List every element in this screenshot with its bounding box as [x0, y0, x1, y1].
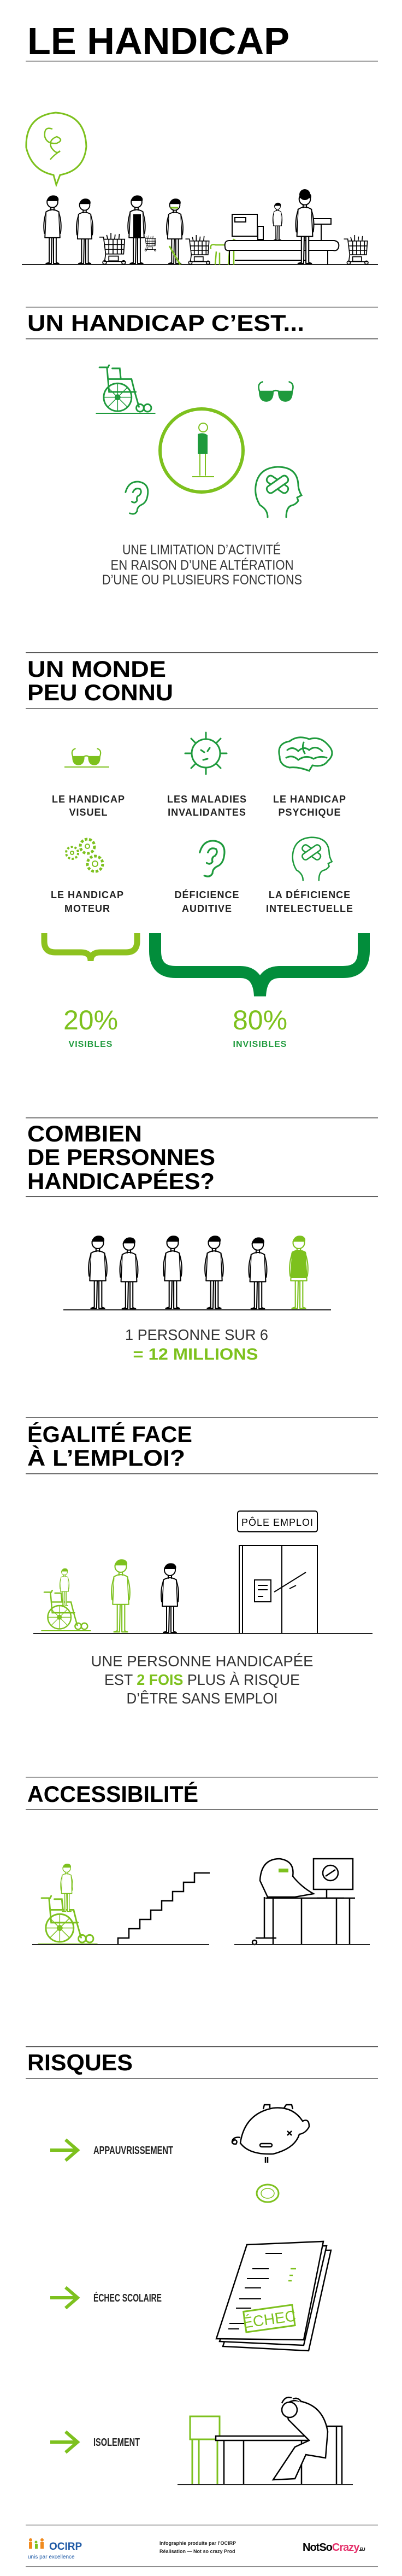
icon grid: types of handicap — [51, 733, 353, 914]
credits: Infographie produite par l’OCIRP — [159, 2540, 236, 2546]
heading: égalité face à l'emploi: ÉGALITÉ FACE — [27, 1421, 192, 1447]
text: definition: D’UNE OU PLUSIEURS FONCTIONS — [102, 572, 302, 588]
labels: LES MALADIES — [167, 794, 247, 805]
labels: LE HANDICAP — [273, 794, 346, 805]
labels: INTELECTUELLE — [266, 903, 353, 914]
icon: guide dog — [211, 239, 239, 265]
icon: wheelchair — [96, 365, 155, 413]
stat: 80%: 80% — [233, 1005, 287, 1035]
icon: glasses visuel — [64, 748, 109, 768]
illustration: definition icons — [96, 365, 302, 517]
icon: head intellectuelle — [293, 838, 332, 880]
text: 1 sur 6: 1 PERSONNE SUR 6 — [125, 1326, 268, 1343]
logo: OCIRP: OCIRP — [49, 2541, 82, 2552]
sign — [238, 1511, 317, 1532]
icon: ear — [126, 482, 148, 514]
risk: appauvrissement — [50, 2105, 309, 2202]
text: 1 sur 6 — [125, 1326, 268, 1363]
chart: brackets visible vs invisible — [44, 933, 364, 1049]
heading: un monde peu connu — [26, 652, 378, 709]
bracket: visibles — [44, 933, 137, 961]
stat: 20%: 20% — [63, 1005, 118, 1035]
arrow — [50, 2432, 78, 2452]
heading: un monde peu connu: UN MONDE — [27, 656, 166, 682]
footer — [26, 2525, 378, 2567]
heading: combien de personnes: HANDICAPÉES? — [27, 1168, 215, 1194]
title: LE HANDICAP — [27, 20, 289, 62]
icon: failed document — [216, 2241, 331, 2351]
credits — [159, 2540, 236, 2554]
heading: accessibilité: ACCESSIBILITÉ — [27, 1781, 198, 1807]
risk: échec scolaire: ÉCHEC — [241, 2307, 297, 2332]
icon: lonely table — [190, 2416, 220, 2485]
icon: central circle with person — [160, 409, 243, 492]
heading: un monde peu connu: PEU CONNU — [27, 680, 173, 705]
icon: glasses — [259, 382, 293, 401]
icon: gears — [66, 839, 103, 871]
text: 2 fois plus à risque: UNE PERSONNE HANDICAPÉE — [91, 1653, 314, 1670]
icon: head with bandage — [256, 467, 302, 517]
icon: brain — [279, 737, 332, 771]
labels: INVALIDANTES — [168, 807, 246, 818]
illustration: six people — [63, 1236, 331, 1310]
logo: OCIRP: unis par excellence — [28, 2554, 75, 2560]
text: 2 fois plus à risque: D’ÊTRE SANS EMPLOI — [127, 1690, 277, 1707]
heading: combien de personnes: COMBIEN — [27, 1121, 142, 1146]
icon: virus — [185, 733, 227, 774]
risk: échec scolaire: ÉCHEC SCOLAIRE — [93, 2292, 162, 2304]
labels: MOTEUR — [64, 903, 110, 914]
labels: LE HANDICAP — [51, 889, 124, 900]
text: 2 fois plus à risque — [91, 1653, 314, 1707]
labels: LA DÉFICIENCE — [269, 889, 351, 900]
heading: un handicap c'est: UN HANDICAP C’EST... — [27, 310, 304, 336]
icon: speech bubble — [26, 113, 86, 185]
illustration: supermarket queue — [22, 113, 378, 265]
illustration: pôle emploi queue — [33, 1511, 373, 1634]
stat: 80%: INVISIBLES — [233, 1040, 287, 1049]
text: definition: UNE LIMITATION D’ACTIVITÉ — [122, 542, 281, 558]
labels — [51, 794, 353, 914]
labels: AUDITIVE — [182, 903, 232, 914]
logo: OCIRP — [28, 2538, 82, 2560]
stat: 20%: VISIBLES — [69, 1040, 113, 1049]
icon: piggy bank — [232, 2105, 309, 2163]
text: definition — [102, 542, 302, 588]
illustration: woman at computer — [234, 1859, 370, 1945]
labels: PSYCHIQUE — [278, 807, 341, 818]
credits: Réalisation — Not so crazy Prod — [159, 2549, 235, 2554]
text: 1 sur 6: = 12 MILLIONS — [133, 1345, 258, 1363]
risk: isolement: ISOLEMENT — [93, 2437, 140, 2449]
heading: combien de personnes — [26, 1117, 378, 1197]
sign: PÔLE EMPLOI — [241, 1517, 314, 1528]
risk: échec scolaire — [50, 2241, 331, 2351]
arrow — [50, 2140, 78, 2161]
heading: combien de personnes: DE PERSONNES — [27, 1144, 215, 1170]
heading: égalité face à l'emploi — [26, 1417, 378, 1474]
stat: 20% — [63, 1005, 118, 1049]
risk: isolement — [50, 2397, 353, 2485]
logo: NotSoCrazy: NotSoCrazy.EU — [303, 2542, 365, 2554]
labels: VISUEL — [69, 807, 108, 818]
arrow — [50, 2287, 78, 2308]
heading: risques: RISQUES — [27, 2050, 133, 2075]
text: definition: EN RAISON D’UNE ALTÉRATION — [110, 557, 294, 573]
bracket: invisibles — [155, 933, 364, 996]
heading: égalité face à l'emploi: À L’EMPLOI? — [27, 1445, 185, 1471]
door — [239, 1545, 317, 1634]
illustration: wheelchair and stairs — [32, 1864, 210, 1945]
stat: 80% — [233, 1005, 287, 1049]
labels: LE HANDICAP — [52, 794, 125, 805]
risk: appauvrissement: APPAUVRISSEMENT — [93, 2145, 173, 2157]
text: 2 fois plus à risque: EST 2 FOIS PLUS À RISQUE — [104, 1671, 300, 1688]
labels: DÉFICIENCE — [174, 889, 240, 900]
icon: ear auditive — [200, 841, 224, 876]
